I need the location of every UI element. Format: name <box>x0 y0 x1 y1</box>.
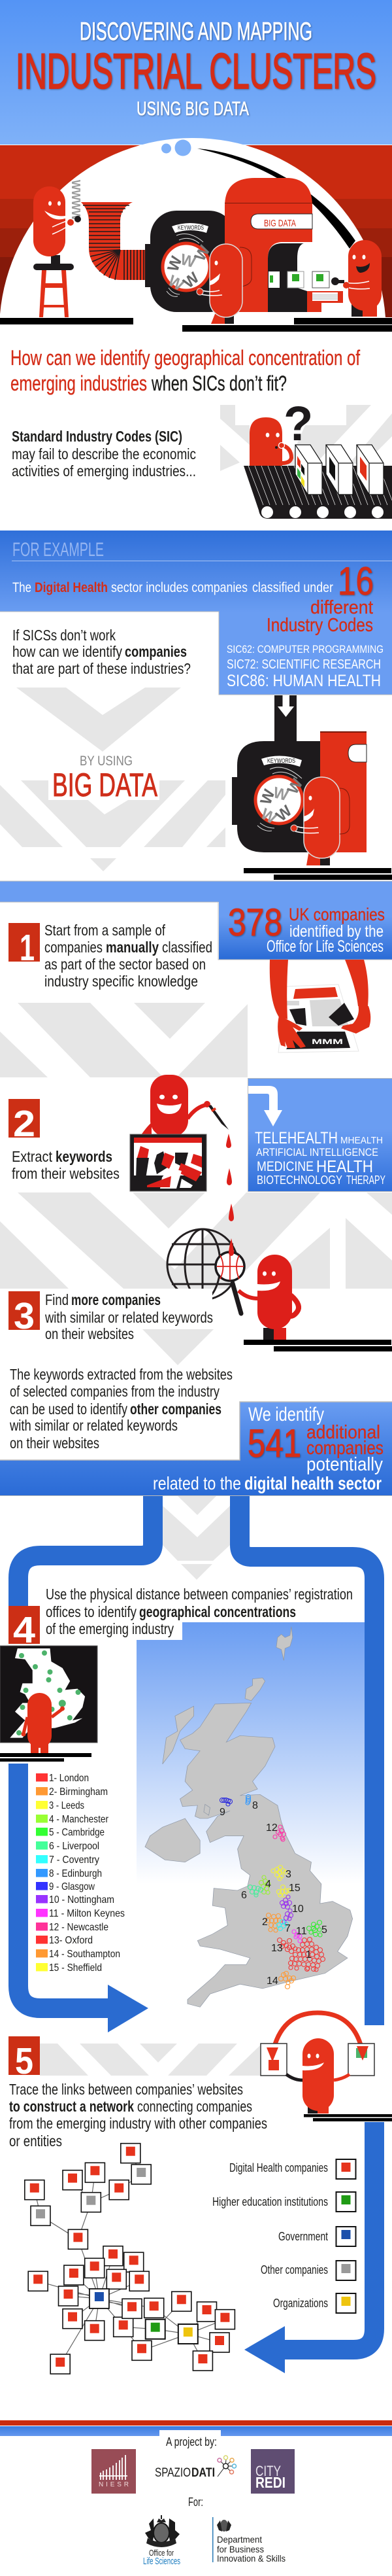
hands and paper illustration <box>270 960 370 1053</box>
keyword explanation text: other companies <box>130 1401 221 1418</box>
step 2 text: from their websites <box>12 1165 120 1182</box>
city legend: 5 - Cambridge <box>49 1827 105 1838</box>
cluster labels: 13 <box>271 1943 283 1954</box>
map panel <box>137 1622 365 2007</box>
step 3 text: on their websites <box>45 1325 134 1342</box>
city legend: 13- Oxford <box>49 1935 93 1946</box>
background chevrons one <box>0 688 225 871</box>
for example panel <box>0 531 392 695</box>
cluster labels: 6 <box>241 1890 247 1901</box>
541 figure: potentially <box>306 1454 383 1475</box>
step 2 text: Extract <box>12 1148 53 1165</box>
logo: SpazioDati: DATI <box>191 2466 215 2480</box>
for label: For: <box>188 2496 203 2509</box>
logo: City Redi: REDI <box>255 2474 286 2491</box>
keyword explanation text: The keywords extracted from the websites <box>10 1366 233 1383</box>
crate <box>130 1134 206 1191</box>
logo: NIESR: NIESR <box>99 2481 129 2488</box>
SIC text <box>12 428 196 479</box>
network legend: Other companies <box>261 2263 328 2276</box>
england silhouette <box>10 1648 85 1738</box>
step 1 text: manually <box>106 939 159 956</box>
step 5 text: to construct a network <box>9 2098 134 2115</box>
step 4: 4 <box>13 1609 35 1651</box>
big data label <box>48 754 159 803</box>
city legend: 9 - Glasgow <box>49 1881 95 1892</box>
step 2: 2 <box>13 1103 35 1145</box>
ladder <box>39 270 69 317</box>
second machine: W <box>257 805 280 828</box>
step 5 <box>8 2036 40 2082</box>
background chevrons two <box>0 1003 392 1365</box>
SIC code list <box>227 643 384 690</box>
city legend: 2- Birmingham <box>49 1786 108 1798</box>
second machine: W <box>272 802 295 825</box>
left blue pipe arrow <box>18 1496 153 2032</box>
title: USING BIG DATA <box>137 98 249 120</box>
city legend: 12 - Newcastle <box>49 1922 108 1933</box>
floor bars three <box>244 1340 392 1351</box>
step 3 text: Find <box>45 1291 69 1308</box>
city legend: 8 - Edinburgh <box>49 1868 102 1879</box>
step 5 text: or entities <box>9 2132 62 2150</box>
16 different industry codes: 16 <box>338 559 374 603</box>
keywords: MHEALTH <box>340 1135 383 1146</box>
network legend: Organizations <box>273 2297 328 2310</box>
big data machine: BIG DATA <box>264 218 296 229</box>
logo: City Redi <box>251 2449 295 2494</box>
SIC text: Standard Industry Codes (SIC) <box>12 428 182 445</box>
541 figure: related to the <box>153 1473 241 1493</box>
keywords <box>255 1129 385 1187</box>
step 3 text: with similar or related keywords <box>44 1309 213 1326</box>
keyword explanation text: can be used to identify <box>10 1401 127 1418</box>
step 1 text <box>44 922 212 990</box>
front robot <box>197 244 242 324</box>
cluster labels: 12 <box>266 1822 278 1834</box>
cluster rings <box>220 1795 325 1989</box>
cluster labels: 9 <box>220 1807 225 1818</box>
logo: NIESR <box>91 2449 136 2494</box>
step 5 text <box>9 2081 267 2150</box>
step 1: 1 <box>20 927 35 969</box>
black machine <box>145 211 235 312</box>
541 figure: We identify <box>248 1404 324 1425</box>
conveyor illustration <box>220 396 392 519</box>
second machine: W <box>284 776 307 797</box>
blood drops <box>226 1134 234 1221</box>
cluster labels: 4 <box>265 1879 271 1890</box>
city legend: 14 - Southampton <box>49 1949 120 1960</box>
step 3 text <box>44 1291 213 1342</box>
big data machine <box>225 178 343 314</box>
magnifying glass <box>216 1238 244 1314</box>
black machine: W <box>164 254 186 274</box>
step 5 text: from the emerging industry with other companies <box>9 2115 267 2132</box>
robot with knife <box>130 1075 229 1191</box>
step 1 text: as part of the sector based on <box>44 956 206 973</box>
city legend: 4 - Manchester <box>49 1814 109 1825</box>
floor bars two <box>244 868 392 880</box>
keywords: TELEHEALTH <box>255 1129 338 1147</box>
globe <box>167 1229 238 1300</box>
logo: SpazioDati: SPAZIO <box>155 2466 191 2480</box>
robot with magnifier <box>238 1255 299 1340</box>
hands and paper illustration: MMM <box>312 1038 343 1046</box>
robot thinking <box>250 417 291 466</box>
network legend: Government <box>278 2230 328 2243</box>
step 4 text: offices to identify <box>46 1603 137 1620</box>
378 figure: 378 <box>228 901 282 944</box>
arrow <box>248 1086 282 1126</box>
floor bars four <box>304 2114 392 2121</box>
cluster labels: 11 <box>296 1926 307 1937</box>
nodes <box>25 2144 235 2374</box>
second machine <box>232 695 367 865</box>
map dots <box>16 1650 81 1735</box>
edges <box>35 2153 225 2364</box>
step 4 text <box>46 1586 353 1637</box>
step 2 text <box>12 1148 120 1182</box>
boxes <box>295 445 384 495</box>
chevrons between pipes <box>163 1496 230 1580</box>
pointing robot <box>21 1693 65 1753</box>
378 blue panel <box>0 881 392 960</box>
companies question <box>12 627 191 677</box>
keyword explanation text: on their websites <box>10 1435 99 1452</box>
logo: City Redi: CITY <box>255 2463 281 2479</box>
16 different industry codes <box>267 559 374 636</box>
keywords banner <box>261 756 302 767</box>
sector sentence: Digital Health <box>35 580 108 595</box>
city legend: 15 - Sheffield <box>49 1962 102 1974</box>
step 4 <box>8 1606 40 1651</box>
question heading: when SICs don’t fit? <box>151 372 287 395</box>
network legend: Higher education institutions <box>212 2195 328 2208</box>
keywords: BIOTECHNOLOGY <box>257 1174 342 1187</box>
sector sentence: classified under <box>252 580 333 595</box>
keywords: MEDICINE <box>257 1159 314 1174</box>
keywords: HEALTH <box>316 1157 373 1176</box>
white circle backdrop <box>0 138 385 317</box>
right blue pipe arrow <box>240 1496 374 2373</box>
step 1 text: industry specific knowledge <box>44 973 198 990</box>
footer bands <box>0 2420 392 2436</box>
screen floor bars <box>0 1753 91 1762</box>
question heading: emerging industries <box>10 372 147 395</box>
step 2 <box>8 1099 40 1145</box>
SIC text: activities of emerging industries... <box>12 462 196 479</box>
second machine: W <box>271 784 290 805</box>
step 1 text: Start from a sample of <box>44 922 165 939</box>
background chevrons three <box>40 2044 260 2076</box>
robot holding linked cards <box>261 2013 374 2114</box>
cluster labels: 14 <box>267 1976 278 1987</box>
conveyor belt <box>244 466 392 519</box>
cluster labels <box>220 1800 327 1987</box>
step 2 text: keywords <box>56 1148 112 1165</box>
step 5: 5 <box>15 2040 33 2082</box>
cluster labels: 10 <box>292 1904 304 1915</box>
black machine: W <box>191 243 214 264</box>
step 4 text: geographical concentrations <box>139 1603 296 1620</box>
logo: Office for Life Sciences <box>143 2515 180 2567</box>
logo: SpazioDati <box>155 2456 237 2480</box>
companies question: companies <box>125 643 187 660</box>
big data label: BY USING <box>80 754 133 769</box>
keywords label: KEYWORDS <box>178 224 204 231</box>
floor bars <box>0 318 392 332</box>
step 3: 3 <box>14 1295 35 1337</box>
step 1 text: classified <box>162 939 212 956</box>
cluster labels: 5 <box>321 1924 327 1936</box>
logo: Department for Business Innovation and Skills <box>212 2517 286 2564</box>
black arc <box>197 148 355 249</box>
step 5 text: Trace the links between companies’ websites <box>9 2081 243 2098</box>
step 5 text: connecting companies <box>137 2098 252 2115</box>
paper strip: WWWW <box>69 180 82 220</box>
big data label: BIG DATA <box>52 767 157 803</box>
funnel pipe <box>81 202 145 280</box>
hero illustration <box>33 140 382 324</box>
step 1 <box>8 923 40 969</box>
city legend: 7 - Coventry <box>49 1854 99 1866</box>
541 figure: additional <box>306 1422 380 1443</box>
question mark: ? <box>284 396 313 451</box>
cluster labels: 3 <box>286 1869 291 1880</box>
network legend: Digital Health companies <box>229 2161 328 2174</box>
cluster labels: 8 <box>252 1800 258 1811</box>
robot on ladder <box>33 186 81 270</box>
question heading <box>10 346 360 395</box>
thought bubbles <box>161 140 191 156</box>
cluster labels: 7 <box>285 1923 291 1934</box>
SIC text: may fail to describe the economic <box>12 445 196 462</box>
companies question: that are part of these industries? <box>12 660 191 677</box>
city legend: 1- London <box>49 1773 89 1784</box>
keyword explanation text: of selected companies from the industry <box>10 1383 220 1400</box>
red hero band <box>0 145 392 317</box>
second machine: W <box>257 787 279 807</box>
step 3 <box>0 1289 212 1337</box>
378 figure <box>228 901 385 956</box>
black machine: W <box>165 272 187 295</box>
keyword explanation text: with similar or related keywords <box>9 1417 178 1434</box>
541 blue panel <box>0 1402 392 1496</box>
sector sentence <box>12 580 333 595</box>
keyword cloud panel <box>248 1078 392 1192</box>
UK map <box>145 1627 353 2007</box>
keyword explanation text <box>9 1366 233 1452</box>
logo: Department for Business Innovation and Skills: for Business <box>217 2544 264 2554</box>
logo: Department for Business Innovation and Skills: Innovation & Skills <box>217 2553 286 2564</box>
companies question: If SICSs don’t work <box>12 627 116 644</box>
black machine: W <box>180 269 203 292</box>
city legend <box>36 1773 125 1974</box>
16 different industry codes: Industry Codes <box>267 615 373 636</box>
network legend <box>212 2159 355 2313</box>
right robot <box>331 240 382 317</box>
sector sentence: The <box>12 580 31 595</box>
sector sentence: sector includes companies <box>111 580 248 595</box>
header background <box>0 0 392 145</box>
keywords banner: KEYWORDS <box>267 757 295 764</box>
for example label: FOR EXAMPLE <box>12 539 104 561</box>
screen with robot pointing <box>0 1646 97 1753</box>
network graph <box>25 2144 235 2374</box>
541 figure: 541 <box>248 1421 301 1465</box>
cluster labels: 15 <box>289 1883 301 1894</box>
16 different industry codes: different <box>310 597 373 618</box>
541 figure <box>153 1404 384 1493</box>
cluster labels: 1 <box>306 1949 312 1960</box>
a project by: A project by: <box>166 2435 217 2448</box>
title <box>16 18 376 120</box>
city legend: 6 - Liverpool <box>49 1841 99 1852</box>
robot <box>291 777 350 865</box>
black machine: W <box>178 251 197 271</box>
logo: Office for Life Sciences: Office for <box>149 2548 174 2558</box>
cluster labels: 2 <box>262 1917 268 1928</box>
city legend: 11 - Milton Keynes <box>49 1908 125 1919</box>
city legend: 3 - Leeds <box>49 1800 84 1811</box>
companies question: how can we identify <box>12 643 122 660</box>
logo: Department for Business Innovation and Skills: Department <box>217 2534 262 2545</box>
step 4 text: of the emerging industry <box>46 1620 174 1637</box>
step 3 text: more companies <box>71 1291 161 1308</box>
logo: Office for Life Sciences: Life Sciences <box>143 2556 180 2567</box>
city legend: 10 - Nottingham <box>49 1894 114 1906</box>
keywords label <box>172 223 208 233</box>
step 1 text: companies <box>44 939 103 956</box>
